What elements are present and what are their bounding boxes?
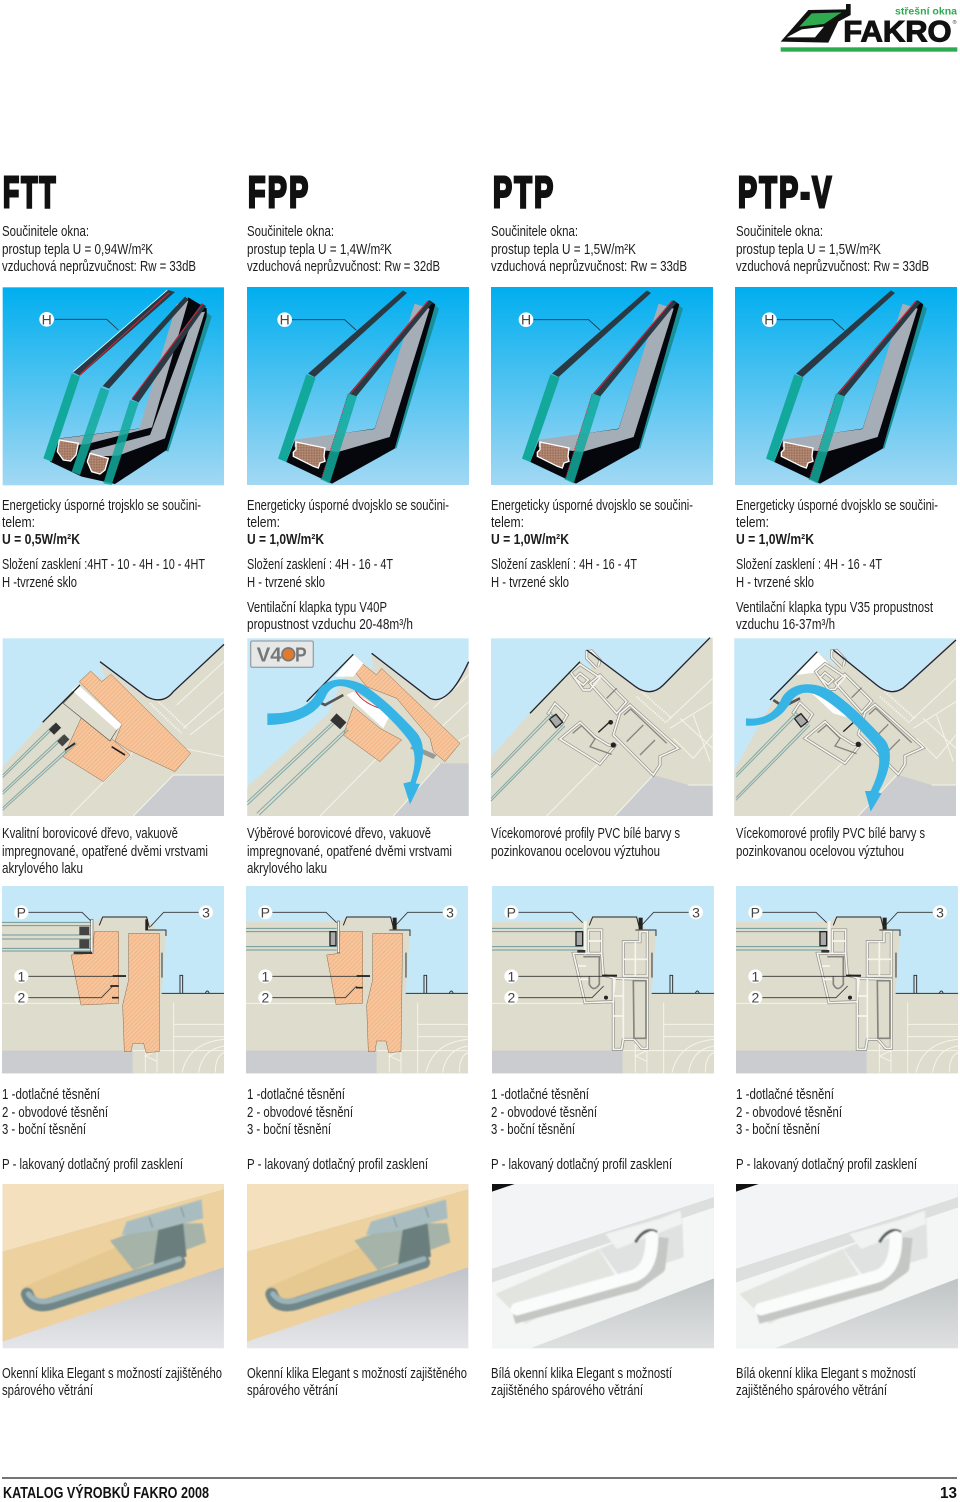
text: PTP-V glazing description: [736, 498, 938, 633]
text: PTP-V seals legend: [736, 1087, 917, 1173]
text: FPP glazing description: U = 1,0W/m²K: [247, 532, 324, 548]
text: FTT seals legend: [2, 1087, 183, 1173]
logo: FAKRO: střešní okna: [895, 6, 957, 17]
text: FPP glazing description: Složení zasklení : 4H - 16 - 4T: [247, 557, 393, 573]
text: FTT coefficients: prostup tepla U = 0,94W/m²K: [2, 242, 153, 258]
text: PTP-V coefficients: Součinitele okna:: [736, 224, 823, 240]
icon: V40P badge: P: [295, 644, 307, 667]
text: FTT glazing description: H -tvrzené sklo: [2, 575, 77, 591]
text: PTP seals legend: 3 - boční těsnění: [491, 1122, 575, 1138]
logo: FAKRO: [781, 4, 957, 52]
panel: PTP-V seals section: 2: [751, 990, 759, 1006]
text: FTT coefficients: [2, 224, 196, 275]
panel: PTP double glazing: H: [521, 312, 531, 328]
text: PTP seals legend: P - lakovaný dotlačný profil zasklení: [491, 1157, 672, 1173]
panel: FPP double glazing: [247, 287, 469, 485]
heading: PTP-V: PTP-V: [738, 167, 834, 216]
panel: PTP seals section: P: [507, 904, 516, 920]
text: PTP seals legend: 2 - obvodové těsnění: [491, 1105, 597, 1121]
text: PTP handle caption: zajištěného spárového větrání: [491, 1383, 643, 1399]
text: FTT frame material: [2, 826, 208, 877]
text: FPP handle caption: Okenní klika Elegant s možností zajištěného: [247, 1366, 467, 1382]
text: PTP glazing description: [491, 498, 693, 591]
text: FPP coefficients: prostup tepla U = 1,4W/m²K: [247, 242, 392, 258]
panel: FPP seals section: 1: [261, 968, 269, 984]
logo: FAKRO: FAKRO: [843, 16, 952, 49]
text: FPP seals legend: [247, 1087, 428, 1173]
panel: PTP-V seals section: 1: [751, 968, 759, 984]
text: FTT seals legend: 2 - obvodové těsnění: [2, 1105, 108, 1121]
text: FTT handle caption: [2, 1366, 222, 1399]
panel: PTP-V double glazing: H: [764, 312, 774, 328]
text: FTT frame material: impregnované, opatřené dvěmi vrstvami: [2, 844, 208, 860]
text: FTT seals legend: P - lakovaný dotlačný profil zasklení: [2, 1157, 183, 1173]
panel: FTT silver handle on wood: [3, 1184, 224, 1348]
text: PTP-V handle caption: [736, 1366, 916, 1399]
text: FPP glazing description: telem:: [247, 515, 280, 531]
text: PTP frame material: Vícekomorové profily PVC bílé barvy s: [491, 826, 680, 842]
footer: page number: 13: [940, 1485, 957, 1502]
text: FPP glazing description: propustnost vzduchu 20-48m³/h: [247, 617, 413, 633]
text: PTP coefficients: Součinitele okna:: [491, 224, 578, 240]
text: PTP frame material: [491, 826, 680, 860]
panel: PTP seals section: 1: [507, 968, 515, 984]
text: FPP handle caption: [247, 1366, 467, 1399]
text: FPP frame material: Výběrové borovicové dřevo, vakuově: [247, 826, 431, 842]
footer: catalogue title: KATALOG VÝROBKŮ FAKRO 2008: [3, 1482, 209, 1502]
panel: FPP seals section: P: [261, 904, 270, 920]
heading: FPP: FPP: [248, 167, 310, 216]
text: FTT coefficients: vzduchová neprůzvučnost: Rw = 33dB: [2, 259, 196, 275]
text: PTP-V glazing description: U = 1,0W/m²K: [736, 532, 814, 548]
panel: PTP-V seals section: [736, 886, 958, 1073]
text: FPP seals legend: 2 - obvodové těsnění: [247, 1105, 353, 1121]
text: FTT glazing description: U = 0,5W/m²K: [2, 532, 80, 548]
text: FPP frame material: akrylového laku: [247, 861, 327, 877]
text: FPP frame material: impregnované, opatřené dvěmi vrstvami: [247, 844, 452, 860]
panel: FPP section with ventilation flap: [247, 638, 469, 816]
text: PTP-V glazing description: H - tvrzené sklo: [736, 575, 814, 591]
text: PTP-V coefficients: prostup tepla U = 1,5W/m²K: [736, 242, 881, 258]
text: FPP glazing description: H - tvrzené sklo: [247, 575, 325, 591]
panel: PTP seals section: [492, 886, 714, 1073]
icon: V40P badge: [251, 641, 313, 667]
text: PTP seals legend: [491, 1087, 672, 1173]
text: PTP-V glazing description: vzduchu 16-37m³/h: [736, 617, 835, 633]
heading: FTT: FTT: [3, 167, 58, 217]
text: FPP glazing description: Ventilační klapka typu V40P: [247, 600, 387, 616]
panel: PTP-V section with ventilation flap: [734, 638, 956, 816]
panel: FPP double glazing: H: [280, 312, 290, 328]
text: PTP-V glazing description: telem:: [736, 515, 769, 531]
text: FPP handle caption: spárového větrání: [247, 1383, 338, 1399]
text: PTP handle caption: Bílá okenní klika Elegant s možností: [491, 1366, 672, 1382]
text: FPP coefficients: Součinitele okna:: [247, 224, 334, 240]
text: PTP coefficients: vzduchová neprůzvučnost: Rw = 33dB: [491, 259, 687, 275]
panel: PTP white handle: [492, 1184, 714, 1348]
text: FTT frame material: akrylového laku: [2, 861, 83, 877]
panel: PTP section, PVC frame: [491, 638, 713, 816]
logo: FAKRO: ®: [953, 19, 957, 26]
panel: PTP double glazing: [491, 287, 713, 485]
text: FTT frame material: Kvalitní borovicové dřevo, vakuově: [2, 826, 178, 842]
text: FPP seals legend: 3 - boční těsnění: [247, 1122, 331, 1138]
text: PTP glazing description: Složení zasklení : 4H - 16 - 4T: [491, 557, 637, 573]
text: FPP seals legend: P - lakovaný dotlačný profil zasklení: [247, 1157, 428, 1173]
panel: FTT seals section: 2: [17, 990, 25, 1006]
panel: PTP seals section: 2: [507, 990, 515, 1006]
panel: PTP-V double glazing: [735, 287, 957, 485]
text: FPP seals legend: 1 -dotlačné těsnění: [247, 1087, 345, 1103]
panel: PTP seals section: 3: [692, 904, 700, 920]
heading: PTP: PTP: [493, 167, 555, 216]
text: PTP coefficients: [491, 224, 687, 275]
text: PTP-V seals legend: 1 -dotlačné těsnění: [736, 1087, 834, 1103]
text: PTP-V frame material: pozinkovanou ocelovou výztuhou: [736, 844, 904, 860]
text: FTT seals legend: 3 - boční těsnění: [2, 1122, 86, 1138]
text: FTT handle caption: Okenní klika Elegant s možností zajištěného: [2, 1366, 222, 1382]
text: FTT glazing description: Energeticky úsporné trojsklo se součini-: [2, 498, 201, 514]
panel: PTP-V seals section: P: [751, 904, 760, 920]
text: PTP glazing description: U = 1,0W/m²K: [491, 532, 569, 548]
panel: FTT section, wood frame: [3, 638, 224, 816]
text: PTP coefficients: prostup tepla U = 1,5W/m²K: [491, 242, 636, 258]
icon: V40P badge: V4: [257, 644, 282, 667]
text: PTP frame material: pozinkovanou ocelovou výztuhou: [491, 844, 660, 860]
panel: FTT seals section: P: [17, 904, 26, 920]
text: PTP handle caption: [491, 1366, 672, 1399]
panel: PTP-V white handle: [736, 1184, 958, 1348]
text: FTT glazing description: Složení zasklení :4HT - 10 - 4H - 10 - 4HT: [2, 557, 205, 573]
panel: FPP seals section: 2: [261, 990, 269, 1006]
text: PTP-V glazing description: Složení zasklení : 4H - 16 - 4T: [736, 557, 882, 573]
panel: FPP silver handle on wood: [247, 1184, 468, 1348]
text: FPP glazing description: [247, 498, 449, 633]
text: FTT glazing description: telem:: [2, 515, 35, 531]
text: FPP coefficients: [247, 224, 440, 275]
text: FTT coefficients: Součinitele okna:: [2, 224, 89, 240]
panel: FTT seals section: 3: [202, 904, 210, 920]
text: PTP-V seals legend: 3 - boční těsnění: [736, 1122, 820, 1138]
text: PTP glazing description: H - tvrzené sklo: [491, 575, 569, 591]
text: FPP coefficients: vzduchová neprůzvučnost: Rw = 32dB: [247, 259, 440, 275]
text: PTP glazing description: Energeticky úsporné dvojsklo se součini-: [491, 498, 693, 514]
text: PTP-V handle caption: zajištěného spárového větrání: [736, 1383, 887, 1399]
panel: FTT triple glazing: [3, 287, 224, 485]
text: PTP-V coefficients: [736, 224, 929, 275]
text: PTP-V seals legend: 2 - obvodové těsnění: [736, 1105, 842, 1121]
text: FTT glazing description: [2, 498, 205, 591]
text: PTP seals legend: 1 -dotlačné těsnění: [491, 1087, 589, 1103]
text: FPP glazing description: Energeticky úsporné dvojsklo se součini-: [247, 498, 449, 514]
text: PTP-V frame material: [736, 826, 925, 860]
panel: FPP seals section: 3: [446, 904, 454, 920]
panel: FPP seals section: [246, 886, 468, 1073]
panel: FTT seals section: 1: [17, 968, 25, 984]
text: FTT seals legend: 1 -dotlačné těsnění: [2, 1087, 100, 1103]
panel: FTT triple glazing: H: [42, 311, 52, 327]
text: PTP-V seals legend: P - lakovaný dotlačný profil zasklení: [736, 1157, 917, 1173]
panel: PTP-V seals section: 3: [936, 904, 944, 920]
panel: FTT seals section: [2, 886, 224, 1073]
text: PTP glazing description: telem:: [491, 515, 524, 531]
text: FPP frame material: [247, 826, 452, 877]
text: FTT handle caption: spárového větrání: [2, 1383, 93, 1399]
